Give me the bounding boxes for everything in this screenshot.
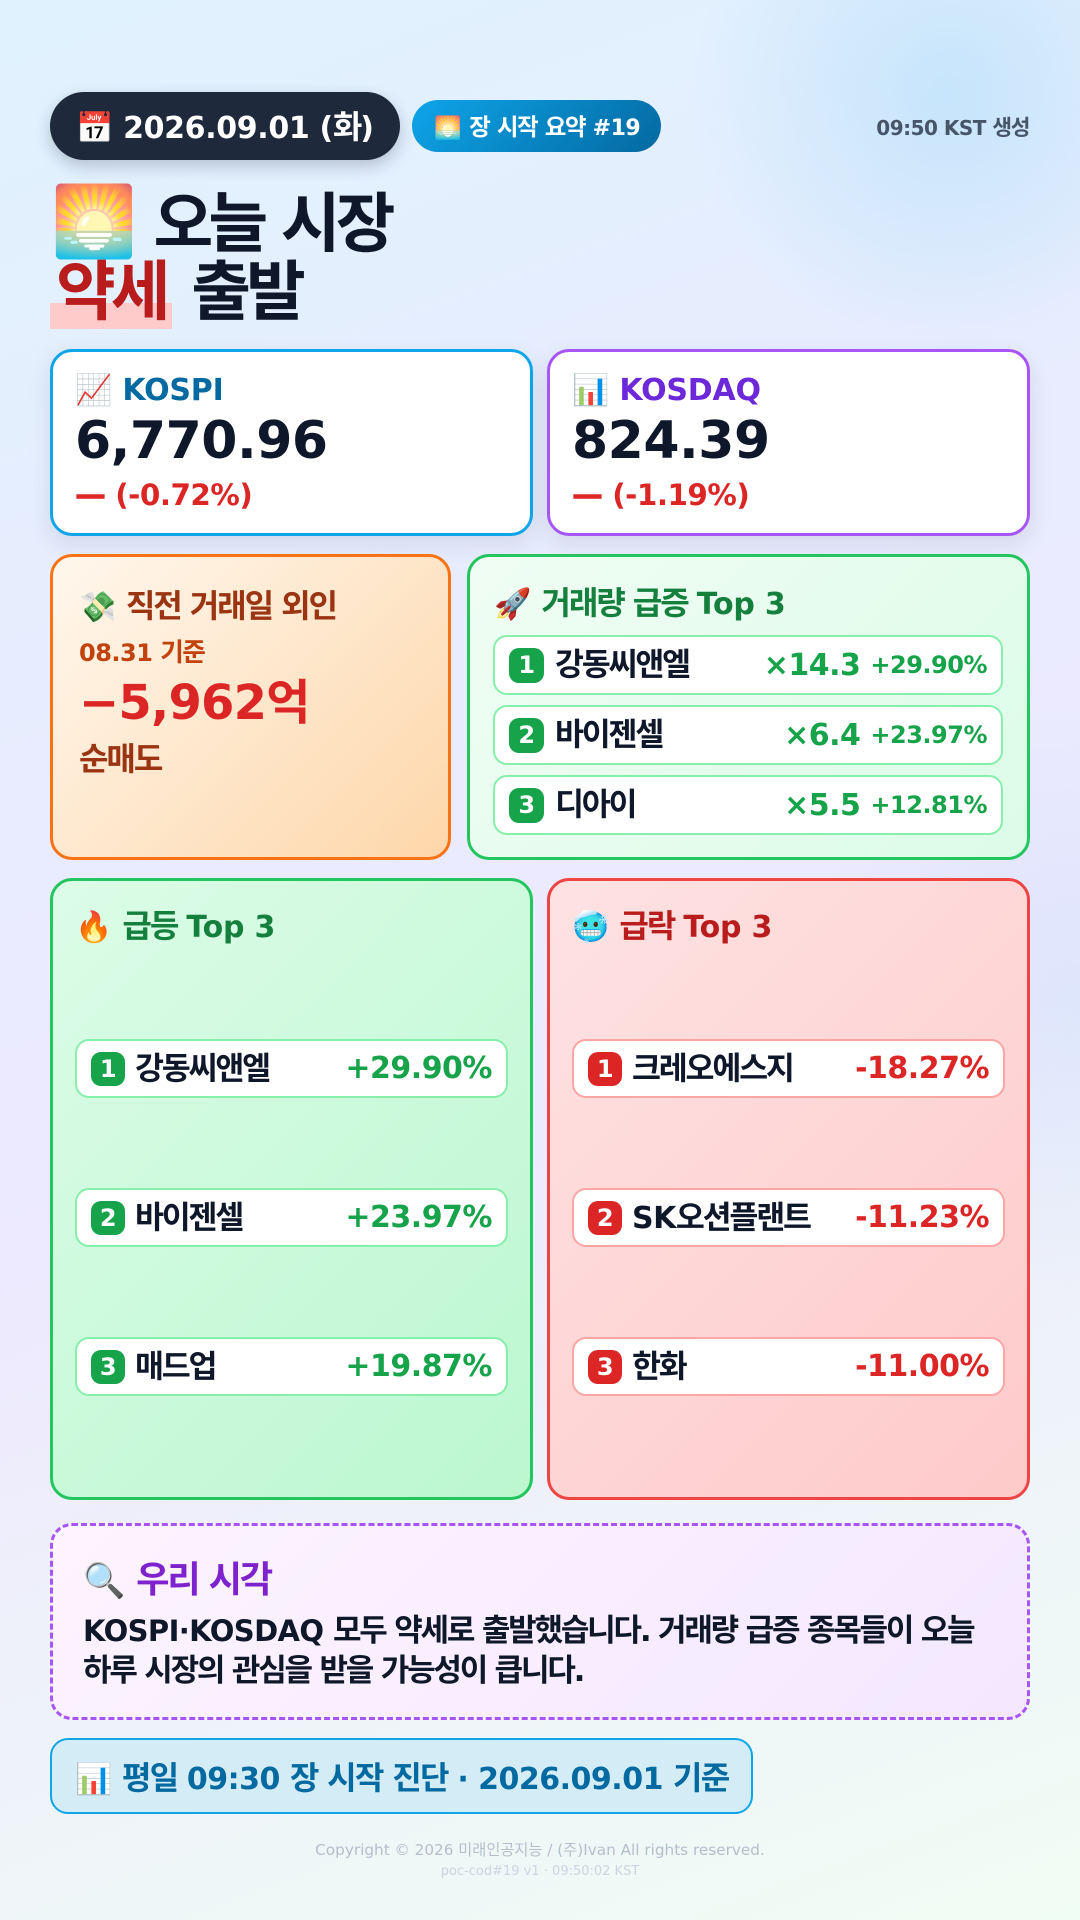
volume row 1: 1 bbox=[518, 651, 535, 679]
diagnosis note bbox=[50, 1738, 753, 1814]
gainer row 1 bbox=[75, 1039, 508, 1098]
panel: top gainers bbox=[50, 878, 533, 1500]
badge: market open summary bbox=[412, 100, 661, 152]
build stamp: poc-cod#19 v1 · 09:50:02 KST bbox=[441, 1864, 639, 1879]
net sell label: 순매도 bbox=[79, 740, 161, 778]
date pill: 📅 2026.09.01 (화) bbox=[76, 108, 374, 146]
panel: KOSDAQ bbox=[547, 349, 1030, 536]
losers heading: 🥶 급락 Top 3 bbox=[572, 907, 772, 945]
KOSDAQ value: 824.39 bbox=[572, 411, 770, 471]
volume row 1: 강동씨앤엘 bbox=[555, 647, 689, 683]
gainer row 1: +29.90% bbox=[345, 1051, 492, 1086]
gainer row 3: 매드업 bbox=[135, 1348, 215, 1384]
loser row 3: -11.00% bbox=[855, 1349, 989, 1384]
volume heading: 🚀 거래량 급증 Top 3 bbox=[494, 584, 786, 622]
loser row 2: 2 bbox=[597, 1204, 613, 1232]
volume row 3: 디아이 bbox=[555, 787, 635, 823]
volume row 2: ×6.4 bbox=[784, 718, 860, 752]
KOSDAQ label: 📊 KOSDAQ bbox=[572, 373, 761, 408]
KOSPI change: — (-0.72%) bbox=[75, 477, 252, 513]
loser row 3: 한화 bbox=[632, 1348, 686, 1384]
panel: our view bbox=[50, 1523, 1030, 1720]
KOSDAQ change: — (-1.19%) bbox=[572, 477, 749, 513]
gainer row 2: 2 bbox=[100, 1204, 116, 1232]
loser row 2: -11.23% bbox=[855, 1200, 989, 1235]
volume row 1: +29.90% bbox=[870, 651, 987, 679]
volume row 2: 2 bbox=[518, 721, 535, 749]
loser row 1: 1 bbox=[597, 1054, 613, 1082]
gainer row 2: 바이젠셀 bbox=[135, 1200, 242, 1236]
loser row 2: SK오션플랜트 bbox=[632, 1200, 810, 1236]
loser row 1 bbox=[572, 1039, 1005, 1098]
panel: volume surge top 3 bbox=[467, 554, 1030, 860]
title bbox=[50, 182, 394, 330]
volume row 1: ×14.3 bbox=[764, 648, 860, 682]
gainer row 1: 강동씨앤엘 bbox=[135, 1050, 269, 1086]
panel: KOSPI bbox=[50, 349, 533, 536]
view body text: KOSPI·KOSDAQ 모두 약세로 출발했습니다. 거래량 급증 종목들이 오늘 bbox=[83, 1613, 973, 1649]
gainer row 3: +19.87% bbox=[345, 1349, 492, 1384]
loser row 1: 크레오에스지 bbox=[632, 1050, 793, 1086]
gainer row 3 bbox=[75, 1337, 508, 1396]
badge: market open summary: 🌅 장 시작 요약 #19 bbox=[434, 113, 640, 141]
volume row 1 bbox=[493, 635, 1003, 695]
title: 출발 bbox=[191, 255, 301, 330]
net sell value: −5,962억 bbox=[79, 675, 310, 731]
view heading: 🔍 우리 시각 bbox=[83, 1558, 271, 1601]
foreign heading: 💸 직전 거래일 외인 bbox=[79, 587, 336, 625]
volume row 3: ×5.5 bbox=[784, 788, 860, 822]
view body text: 하루 시장의 관심을 받을 가능성이 큽니다. bbox=[83, 1653, 583, 1689]
loser row 2 bbox=[572, 1188, 1005, 1247]
volume row 2: +23.97% bbox=[870, 721, 987, 749]
gainers heading: 🔥 급등 Top 3 bbox=[75, 907, 275, 945]
gainer row 2: +23.97% bbox=[345, 1200, 492, 1235]
KOSPI value: 6,770.96 bbox=[75, 411, 328, 471]
volume row 2 bbox=[493, 705, 1003, 765]
loser row 3: 3 bbox=[597, 1352, 613, 1380]
copyright: Copyright © 2026 미래인공지능 / (주)Ivan All rights reserved. bbox=[315, 1841, 765, 1859]
loser row 3 bbox=[572, 1337, 1005, 1396]
volume row 3 bbox=[493, 775, 1003, 835]
volume row 3: 3 bbox=[518, 791, 535, 819]
gainer row 3: 3 bbox=[100, 1352, 116, 1380]
KOSPI label: 📈 KOSPI bbox=[75, 373, 224, 408]
reference date: 08.31 기준 bbox=[79, 638, 204, 668]
loser row 1: -18.27% bbox=[855, 1051, 989, 1086]
date pill bbox=[50, 92, 400, 160]
volume row 2: 바이젠셀 bbox=[555, 717, 662, 753]
panel: foreign investors bbox=[50, 554, 451, 860]
title: 약세 bbox=[56, 255, 166, 330]
panel: top losers bbox=[547, 878, 1030, 1500]
volume row 3: +12.81% bbox=[870, 791, 987, 819]
title: 🌅 오늘 시장 bbox=[51, 182, 390, 262]
view body text bbox=[83, 1613, 974, 1689]
gainer row 2 bbox=[75, 1188, 508, 1247]
gainer row 1: 1 bbox=[100, 1054, 116, 1082]
generated time: 09:50 KST 생성 bbox=[876, 116, 1029, 141]
diagnosis note: 📊 평일 09:30 장 시작 진단 · 2026.09.01 기준 bbox=[75, 1759, 729, 1797]
